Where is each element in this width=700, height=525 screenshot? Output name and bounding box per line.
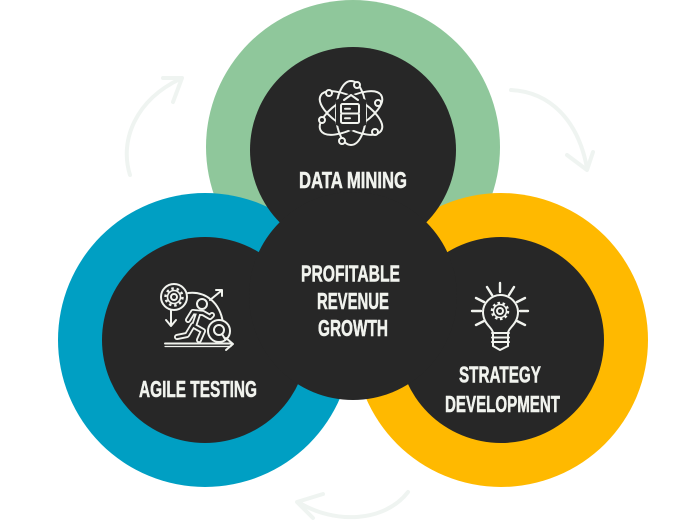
green ring: data mining <box>206 0 500 294</box>
label: strategy development <box>445 362 560 417</box>
dark disc: data mining <box>250 47 456 253</box>
center label: profitable revenue growth: PROFITABLE <box>301 260 400 286</box>
yellow ring: strategy development <box>354 193 648 487</box>
dark disc: strategy development <box>398 237 604 443</box>
arrow: top right cycle <box>511 90 593 170</box>
arrow: bottom cycle <box>297 492 408 518</box>
icon: running person with gear and magnifier <box>161 284 233 350</box>
icon: light bulb with gear <box>472 283 528 350</box>
icon: atom with server <box>313 81 389 145</box>
center label: profitable revenue growth: GROWTH <box>318 315 388 341</box>
label: data mining: DATA MINING <box>299 167 407 193</box>
label: agile testing: AGILE TESTING <box>139 376 257 402</box>
center label: profitable revenue growth <box>301 260 400 341</box>
label: strategy development: STRATEGY <box>459 362 541 388</box>
center label: profitable revenue growth: REVENUE <box>317 288 389 314</box>
dark disc: center <box>249 192 457 400</box>
label: strategy development: DEVELOPMENT <box>445 391 560 417</box>
blue ring: agile testing <box>58 193 352 487</box>
dark disc: agile testing <box>102 237 308 443</box>
arrow: top left cycle <box>127 78 182 175</box>
